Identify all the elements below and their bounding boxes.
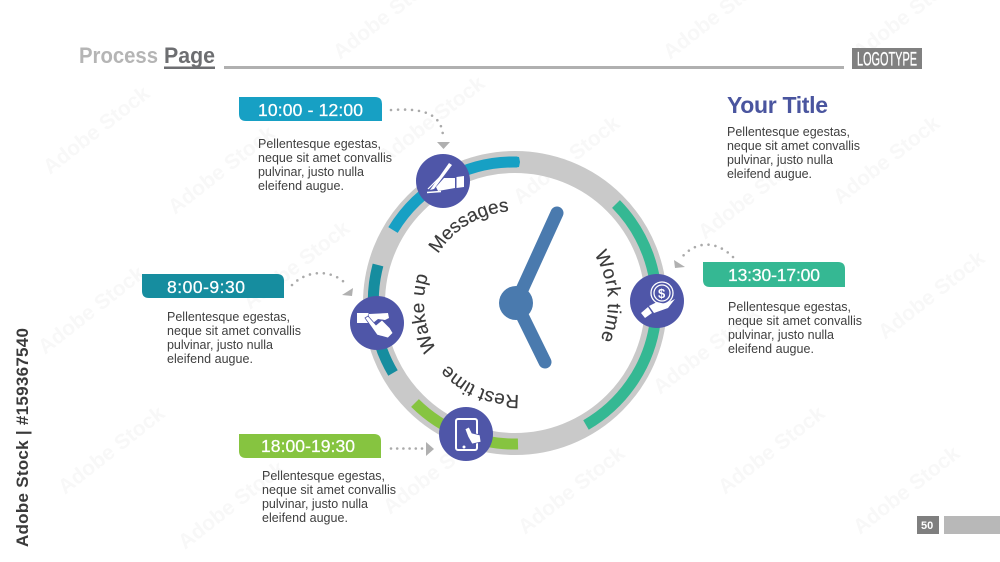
text: Adobe Stock (849, 442, 964, 539)
arrow: dotted to pen icon (391, 110, 450, 149)
time label: 10:00 - 12:00 (258, 100, 363, 120)
text block: eleifend augue. (728, 342, 814, 356)
text: Adobe Stock (649, 302, 764, 399)
text block: pulvinar, justo nulla (728, 328, 834, 342)
panel: 13:30-17:00 (674, 245, 862, 356)
text block: neque sit amet convallis (258, 151, 392, 165)
text: Adobe Stock (164, 122, 279, 219)
title: your title: Your Title (727, 92, 828, 118)
curved label: work time: Work time (596, 248, 622, 342)
panel: 10:00 - 12:00 (239, 97, 450, 193)
text block: eleifend augue. (258, 179, 344, 193)
panel: 18:00-19:30 (239, 434, 434, 525)
logotype badge: LOGOTYPE (857, 50, 917, 70)
text: Adobe Stock (714, 402, 829, 499)
text block (728, 300, 862, 356)
arc: wake up segment (373, 265, 393, 373)
arrow: dotted to watch icon (292, 273, 353, 296)
page number: 50 (921, 520, 933, 532)
text block (258, 137, 392, 193)
text block: your title body: eleifend augue. (727, 167, 812, 181)
stock id text: Adobe Stock | #159367540 (13, 328, 32, 547)
text block: pulvinar, justo nulla (258, 165, 364, 179)
text block: your title body: pulvinar, justo nulla (727, 153, 833, 167)
panel: 8:00-9:30 (142, 273, 353, 366)
time label (239, 97, 382, 121)
text block: your title body: Pellentesque egestas, (727, 125, 850, 139)
text: Adobe Stock (874, 247, 989, 344)
text: Adobe Stock (379, 422, 494, 519)
text block: your title body (727, 125, 860, 181)
text: Adobe Stock (514, 442, 629, 539)
curved label: messages: Messages (428, 202, 508, 253)
time label (142, 274, 284, 298)
icon: hand tapping watch (350, 296, 404, 350)
curved label: rest time: Rest time (442, 366, 518, 408)
arrow: dotted to coin icon (674, 245, 733, 268)
icon: hand writing with pen (416, 154, 470, 208)
page heading: Page (164, 43, 215, 68)
time label (239, 434, 381, 458)
time label (703, 262, 845, 287)
text block: Pellentesque egestas, (262, 469, 385, 483)
page number (917, 516, 939, 534)
text block: eleifend augue. (262, 511, 348, 525)
arc: work time segment (586, 204, 656, 425)
text: Adobe Stock (374, 72, 489, 169)
panel: your title (727, 92, 860, 181)
text block: Pellentesque egestas, (728, 300, 851, 314)
arc: messages segment (393, 156, 520, 230)
arrow: dotted to tablet icon (391, 442, 434, 456)
text: Adobe Stock (239, 217, 354, 314)
text: Adobe Stock (509, 112, 624, 209)
text: Adobe Stock (829, 112, 944, 209)
text: Adobe Stock (54, 402, 169, 499)
text: Adobe Stock (694, 147, 809, 244)
time label: 13:30-17:00 (728, 265, 820, 285)
text: Adobe Stock (34, 262, 149, 359)
clock hands (499, 213, 557, 362)
text block: eleifend augue. (167, 352, 253, 366)
text block: neque sit amet convallis (728, 314, 862, 328)
icon: hand holding coin: $ (658, 286, 666, 301)
text block: pulvinar, justo nulla (262, 497, 368, 511)
text: Adobe Stock (174, 457, 289, 554)
icon: hand holding coin (630, 274, 684, 328)
text block: neque sit amet convallis (167, 324, 301, 338)
time label: 18:00-19:30 (261, 436, 355, 456)
page heading: Process (79, 43, 158, 68)
text block: pulvinar, justo nulla (167, 338, 273, 352)
clock ring (374, 162, 656, 444)
text: Adobe Stock (39, 82, 154, 179)
text block (167, 310, 301, 366)
logotype badge (852, 48, 922, 70)
text block: Pellentesque egestas, (258, 137, 381, 151)
curved label: wake up: Wake up (412, 274, 434, 355)
icon: finger on tablet (439, 407, 493, 461)
text block (262, 469, 396, 525)
time label: 8:00-9:30 (167, 277, 245, 297)
text block: neque sit amet convallis (262, 483, 396, 497)
arc: rest time segment (415, 403, 518, 444)
text block: Pellentesque egestas, (167, 310, 290, 324)
text block: your title body: neque sit amet convallis (727, 139, 860, 153)
page heading (79, 43, 215, 69)
